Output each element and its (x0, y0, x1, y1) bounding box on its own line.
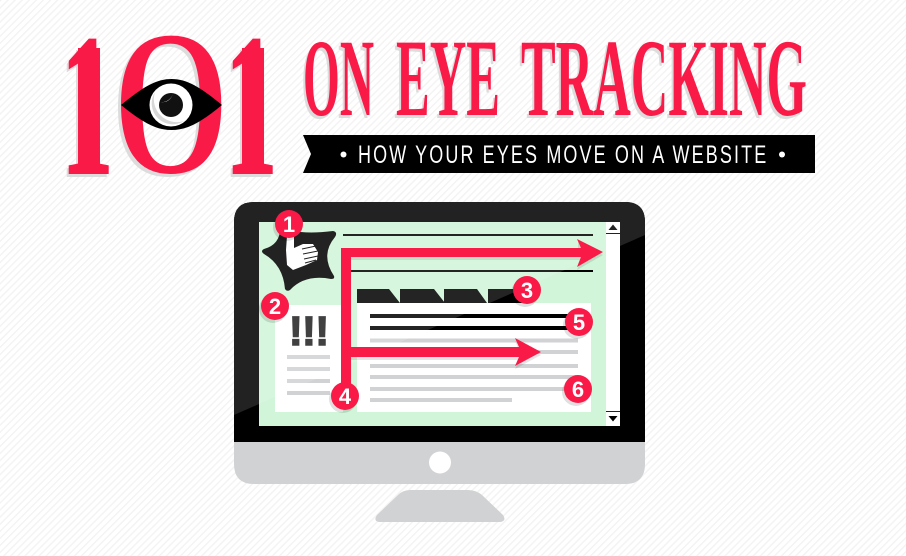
heading: On Eye Tracking: EYE (394, 20, 498, 142)
heading: On Eye Tracking: ON (303, 17, 374, 139)
monitor (234, 202, 645, 522)
heading: On Eye Tracking (301, 17, 807, 142)
marker 2 (259, 292, 289, 323)
marker 4 (329, 382, 359, 413)
marker 5 (563, 308, 593, 339)
thumbs up hand (286, 236, 318, 270)
marker 1: 1 (283, 212, 295, 237)
arrows: gaze path (341, 239, 603, 390)
power button (429, 452, 451, 474)
banner: subtitle: HOW YOUR EYES MOVE ON A WEBSITE (358, 140, 766, 169)
arrow shadows (341, 242, 603, 390)
marker 1 (273, 210, 303, 241)
heading: On Eye Tracking: ON (301, 20, 372, 142)
marker 3: 3 (521, 278, 533, 303)
middle gaze arrow (351, 338, 541, 366)
top rule lines (343, 234, 593, 272)
numeral 1 right: 1 (222, 0, 276, 222)
banner: subtitle (303, 135, 815, 173)
icon: eye (121, 79, 222, 130)
marker 6 (562, 375, 592, 406)
sidebar panel (275, 305, 343, 412)
sidebar panel: !!! (289, 308, 329, 354)
marker 4: 4 (339, 384, 352, 409)
content panel (357, 303, 591, 412)
monitor bezel (234, 202, 645, 442)
navigation tabs (357, 289, 522, 303)
marker 3 (511, 276, 541, 307)
panel: web page screen (259, 222, 620, 426)
title: 101 with eye (58, 0, 278, 222)
marker 6: 6 (572, 377, 584, 402)
monitor stand (375, 490, 504, 522)
icon: star badge with thumbs up (262, 224, 336, 291)
scrollbar (606, 222, 620, 426)
top gaze arrow (341, 239, 603, 390)
marker 2: 2 (269, 294, 281, 319)
gloss over screen (259, 222, 606, 404)
monitor chin (234, 442, 645, 484)
numeral 1 left: 1 (58, 0, 112, 222)
marker 5: 5 (573, 310, 585, 335)
heading: On Eye Tracking: EYE (396, 17, 500, 139)
